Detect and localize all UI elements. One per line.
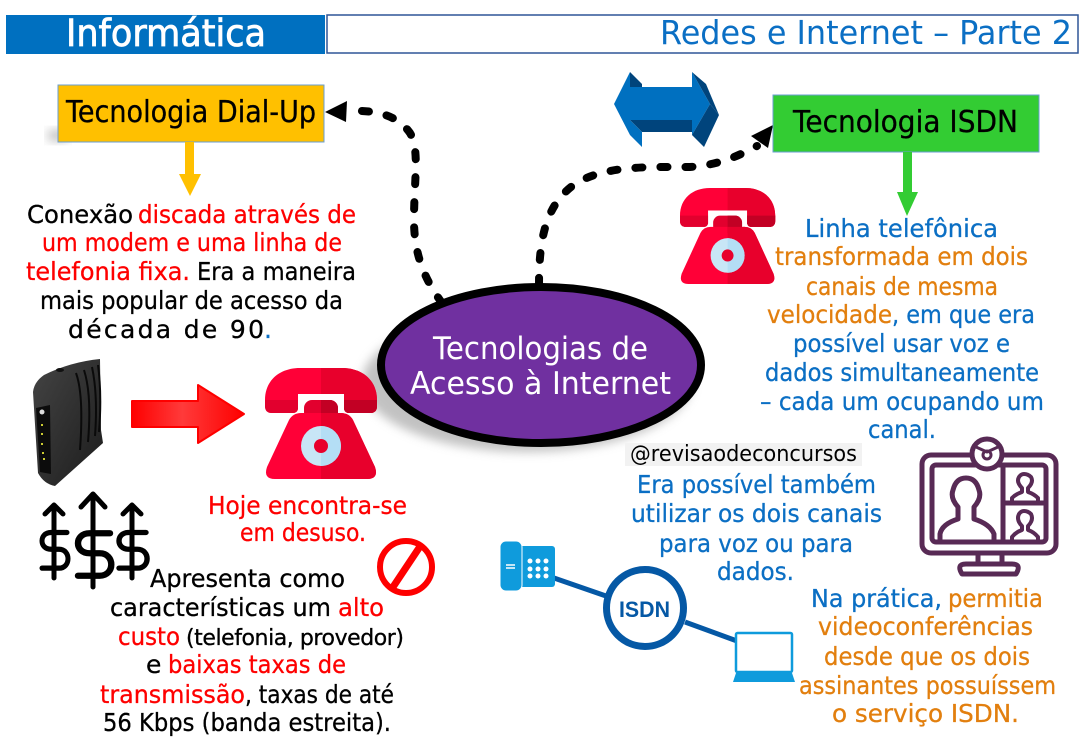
icon: rising dollars bbox=[42, 494, 147, 587]
text: costs and rates: Apresenta como bbox=[150, 564, 345, 593]
text: ISDN description: – cada um ocupando um bbox=[760, 387, 1044, 416]
text: costs and rates: 56 Kbps (banda estreita). bbox=[103, 708, 391, 737]
text: obsolete note: em desuso. bbox=[240, 518, 366, 547]
arrow: ISDN down bbox=[897, 152, 918, 216]
ISDN node: ISDN bbox=[619, 597, 670, 622]
text: Dial-Up description: discada através de bbox=[138, 200, 356, 229]
text: costs and rates: características um bbox=[110, 593, 331, 622]
text: costs and rates: e bbox=[146, 650, 161, 679]
text: both channels: utilizar os dois canais bbox=[631, 499, 882, 528]
text: obsolete note bbox=[208, 491, 407, 547]
ellipse title bbox=[410, 331, 671, 402]
header topic title: Redes e Internet – Parte 2 bbox=[660, 13, 1072, 52]
Dial-Up heading box bbox=[48, 85, 324, 142]
text: Dial-Up description: Conexão bbox=[27, 200, 133, 229]
icon: small red telephone bbox=[680, 188, 775, 284]
text: costs and rates: baixas taxas de bbox=[168, 650, 346, 679]
text: costs and rates: , taxas de até bbox=[245, 680, 394, 709]
icon: laptop bbox=[733, 633, 795, 682]
text: obsolete note: Hoje encontra-se bbox=[208, 491, 407, 520]
watermark handle: @revisaodeconcursos bbox=[630, 442, 857, 467]
text: ISDN description: Linha telefônica bbox=[805, 214, 998, 243]
text: videoconference note: permitia bbox=[948, 584, 1043, 613]
ISDN heading: Tecnologia ISDN bbox=[792, 105, 1018, 140]
header: topic bar bbox=[327, 13, 1078, 53]
text: Dial-Up description: Era a maneira bbox=[197, 257, 356, 286]
text: both channels: Era possível também bbox=[637, 470, 876, 499]
icon: prohibited sign bbox=[380, 541, 432, 593]
text: Dial-Up description: mais popular de acesso da bbox=[40, 286, 343, 315]
text: Dial-Up description: década de 90 bbox=[68, 315, 264, 344]
text: videoconference note bbox=[799, 584, 1056, 728]
text: costs and rates bbox=[100, 564, 404, 737]
text: ISDN description bbox=[760, 214, 1044, 444]
text: ISDN description: canais de mesma bbox=[806, 272, 998, 301]
icon: large red telephone bbox=[265, 368, 377, 479]
dashed arrow to ISDN bbox=[539, 125, 773, 285]
ellipse title: Acesso à Internet bbox=[410, 366, 671, 402]
text: costs and rates: custo bbox=[118, 622, 180, 651]
text: both channels: dados. bbox=[717, 557, 794, 586]
text: ISDN description: possível usar voz e bbox=[793, 329, 1010, 358]
icon: blue double arrow bbox=[614, 72, 719, 147]
text: ISDN description: dados simultaneamente bbox=[765, 358, 1039, 387]
text: costs and rates: transmissão bbox=[100, 680, 245, 709]
diagram: ISDN network bbox=[500, 541, 795, 682]
text: Dial-Up description bbox=[26, 200, 356, 344]
text: videoconference note: videoconferências bbox=[818, 612, 1033, 641]
central ellipse bbox=[362, 287, 701, 452]
text: ISDN description: velocidade bbox=[767, 300, 892, 329]
icon: modem bbox=[33, 359, 103, 486]
text: costs and rates: (telefonia, provedor) bbox=[186, 626, 404, 651]
text: videoconference note: assinantes possuíssem bbox=[799, 671, 1056, 700]
header subject title: Informática bbox=[66, 12, 266, 55]
dashed arrow to Dial-Up bbox=[325, 101, 442, 303]
text: videoconference note: Na prática, bbox=[811, 584, 942, 613]
ellipse title: Tecnologias de bbox=[432, 331, 648, 367]
text: ISDN description: canal. bbox=[868, 415, 936, 444]
ISDN heading box bbox=[773, 95, 1039, 152]
text: Dial-Up description: telefonia fixa. bbox=[26, 257, 190, 286]
ISDN node bbox=[606, 570, 684, 646]
icon: desk phone bbox=[500, 541, 555, 591]
text: costs and rates: alto bbox=[338, 593, 384, 622]
icon: videoconference monitor bbox=[922, 439, 1056, 574]
text: Dial-Up description: um modem e uma linha de bbox=[42, 228, 342, 257]
arrow: Dial-Up down bbox=[179, 142, 201, 196]
text: videoconference note: o serviço ISDN. bbox=[832, 699, 1019, 728]
text: ISDN description: transformada em dois bbox=[775, 242, 1028, 271]
text: both channels: para voz ou para bbox=[659, 529, 853, 558]
text: ISDN description: , em que era bbox=[892, 300, 1035, 329]
Dial-Up heading: Tecnologia Dial-Up bbox=[65, 95, 316, 130]
text: videoconference note: desde que os dois bbox=[824, 642, 1030, 671]
text: both channels bbox=[631, 470, 882, 586]
header: subject bar bbox=[6, 12, 325, 55]
text: Dial-Up description: . bbox=[264, 315, 272, 344]
arrow: red modem to phone bbox=[132, 385, 244, 443]
